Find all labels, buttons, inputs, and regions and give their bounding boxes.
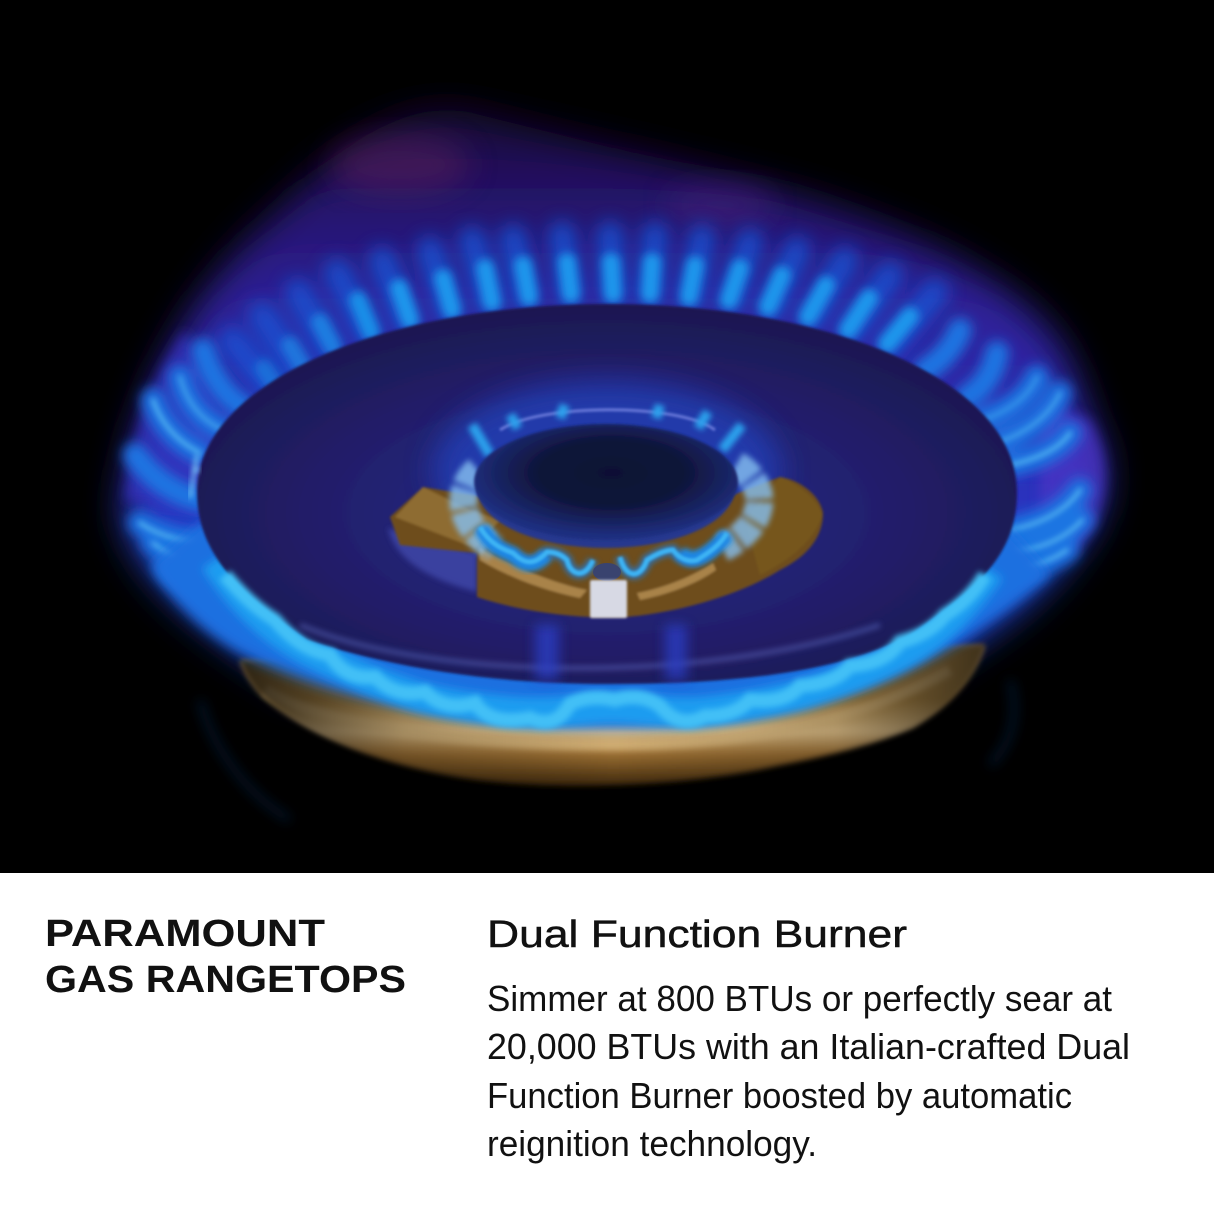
feature description: Function Burner boosted by automatic bbox=[487, 1075, 1072, 1116]
title: PARAMOUNT bbox=[45, 913, 325, 955]
title bbox=[45, 913, 406, 1001]
side flame arcs: blue body bbox=[135, 330, 1082, 588]
igniter bbox=[590, 563, 627, 618]
upper flame tongues: core bbox=[264, 262, 910, 385]
feature description: 20,000 BTUs with an Italian-crafted Dual bbox=[487, 1026, 1130, 1067]
brass inner burner bbox=[390, 477, 823, 617]
light ring under brass bbox=[388, 528, 477, 592]
faint burner grate reflections bbox=[200, 680, 1014, 820]
main burner disk bbox=[197, 304, 1017, 684]
burner cap bbox=[474, 424, 738, 548]
disk front reflection bbox=[300, 625, 880, 668]
upper flame tongues: glow bbox=[232, 235, 935, 387]
feature description: Simmer at 800 BTUs or perfectly sear at bbox=[487, 978, 1112, 1019]
left spark on disk edge bbox=[190, 455, 200, 498]
title: GAS RANGETOPS bbox=[45, 959, 406, 1001]
caption panel bbox=[0, 873, 1214, 1214]
inner flames bbox=[463, 405, 759, 574]
blue light streaks bbox=[535, 625, 687, 680]
flame haze bbox=[122, 110, 1105, 690]
scalloped flame tips bbox=[225, 575, 985, 722]
lower flame band bbox=[150, 520, 1050, 728]
feature heading: Dual Function Burner bbox=[487, 914, 907, 956]
side flame arcs: bright filaments bbox=[140, 377, 1082, 573]
feature description: reignition technology. bbox=[487, 1123, 817, 1164]
photo: gas burner flame bbox=[0, 0, 1214, 873]
brass outer ring bbox=[240, 645, 985, 786]
feature description bbox=[487, 978, 1130, 1164]
inner flame glow bbox=[432, 380, 782, 560]
